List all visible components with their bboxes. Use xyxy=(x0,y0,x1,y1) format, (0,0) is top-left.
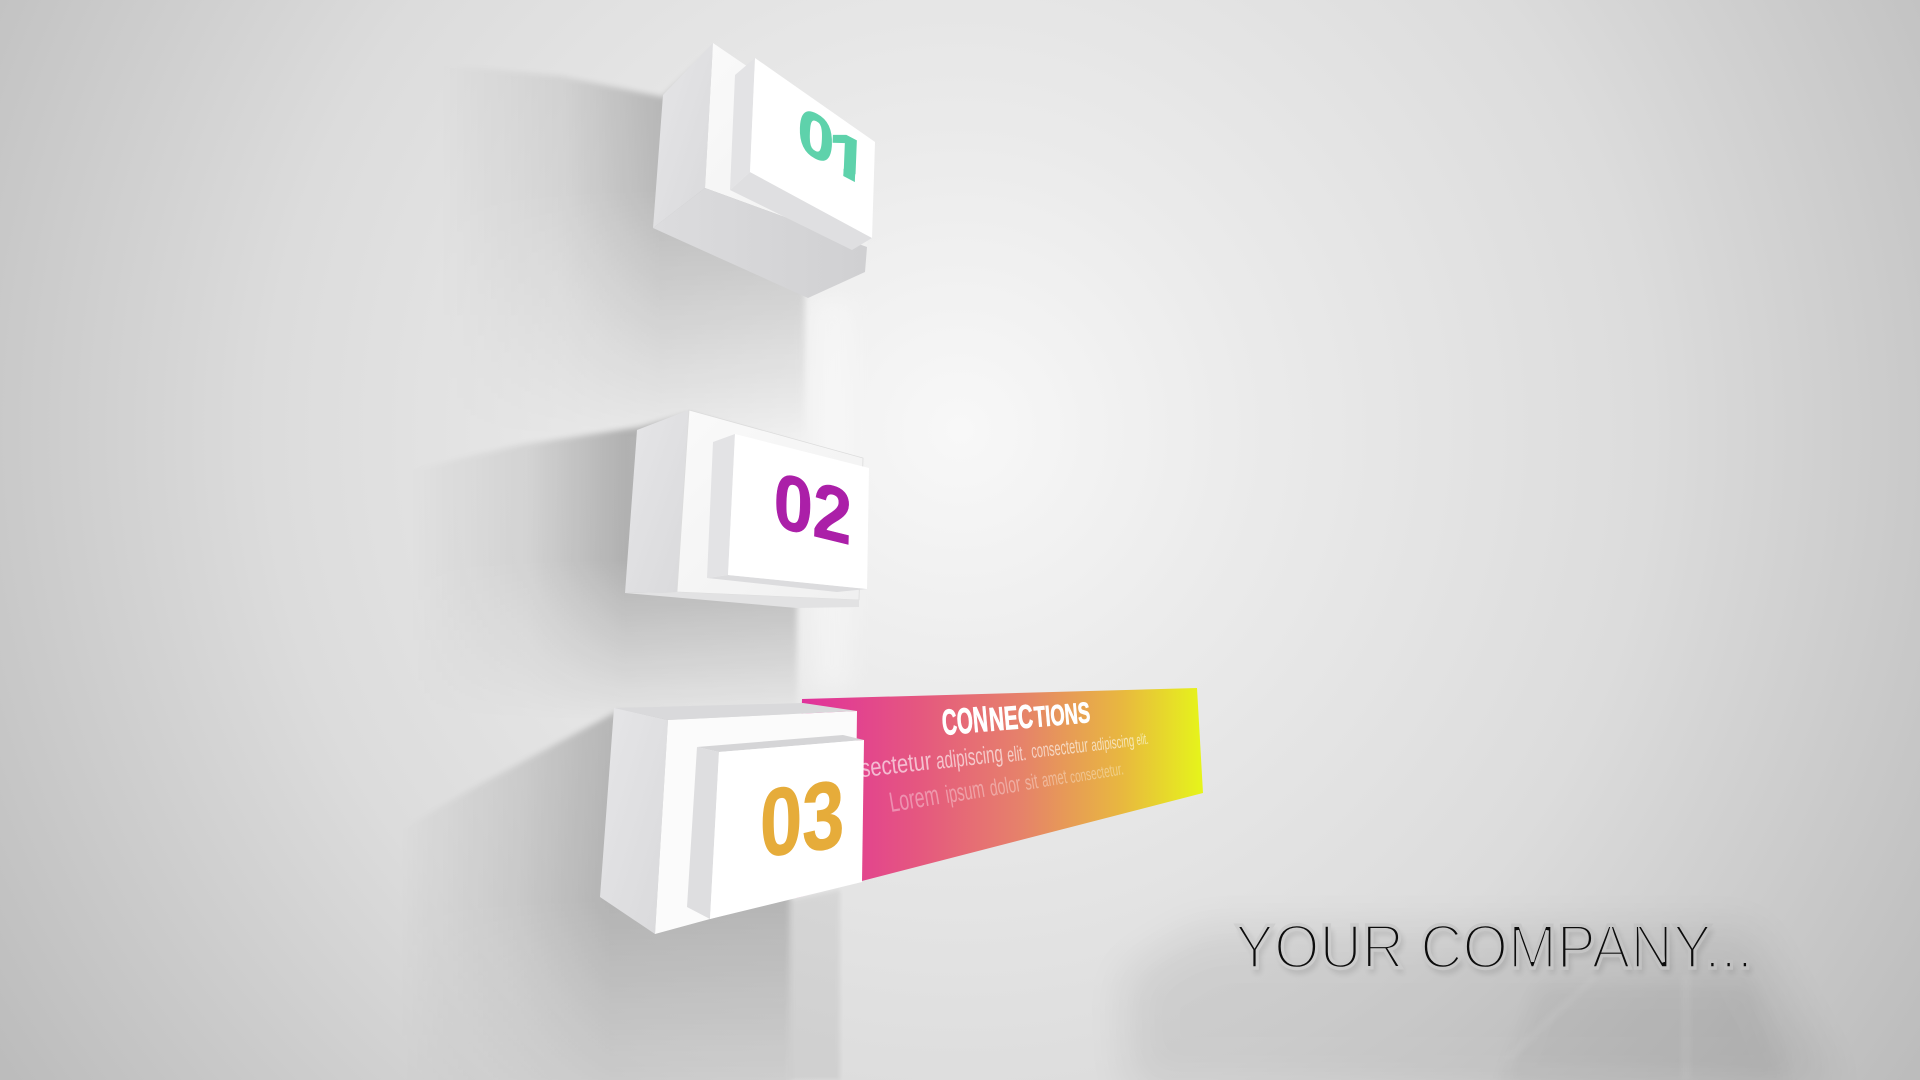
tagline shadow: YOUR COMPANY... xyxy=(1238,918,1756,987)
ribbon heading: TIONS xyxy=(1033,697,1091,734)
company tagline xyxy=(1235,913,1756,987)
gradient ribbon xyxy=(796,688,1203,898)
ribbon text line 1: consectetur xyxy=(826,745,933,787)
ribbon text line 1: elit. xyxy=(1136,731,1149,749)
card side xyxy=(687,747,719,919)
ribbon text line 1: adipiscing xyxy=(1090,731,1135,755)
outer block underside xyxy=(653,188,867,298)
outer block top xyxy=(614,703,857,720)
ribbon heading: NEC xyxy=(987,697,1034,738)
number 01: 0 xyxy=(796,92,835,181)
outer block front xyxy=(655,711,857,934)
step 01 block xyxy=(653,43,875,298)
step 03 block xyxy=(600,703,864,934)
card side xyxy=(707,434,735,578)
ribbon text line 1: elit. xyxy=(1006,742,1027,767)
card top xyxy=(697,735,864,752)
number 01: 1 xyxy=(827,114,870,201)
ribbon text line 1: consectetur xyxy=(1030,735,1089,763)
outer block side xyxy=(600,708,668,934)
outer block underside xyxy=(625,592,859,608)
card underside xyxy=(707,575,867,592)
ribbon text line 2: Lorem xyxy=(887,779,941,818)
outer block front xyxy=(705,43,870,247)
ribbon heading xyxy=(940,697,1091,743)
number 01 xyxy=(800,111,857,182)
ribbon text line 2: sit xyxy=(1023,770,1040,795)
number 02: 02 xyxy=(773,455,853,562)
ribbon text line 2: consectetur. xyxy=(1069,759,1125,787)
card face xyxy=(710,740,864,919)
cast shadows xyxy=(448,55,840,1080)
ribbon text line 1: adipiscing xyxy=(935,740,1004,775)
outer block side xyxy=(653,43,713,228)
ribbon text line 2 xyxy=(887,759,1125,818)
ribbon text line 1 xyxy=(826,731,1149,787)
ribbon text line 2: ipsum xyxy=(943,775,986,809)
card face xyxy=(750,58,875,238)
card side xyxy=(730,58,755,190)
outer block side xyxy=(625,410,689,593)
ribbon heading: CON xyxy=(940,698,990,743)
ribbon text line 2: amet xyxy=(1040,766,1069,792)
card underside xyxy=(730,172,872,250)
step 02 block xyxy=(625,410,869,608)
ribbon text line 2: dolor xyxy=(988,770,1023,801)
tagline text: YOUR COMPANY... xyxy=(1235,913,1753,982)
card face xyxy=(728,434,869,589)
outer block front xyxy=(677,410,863,600)
number 03: 03 xyxy=(760,760,844,878)
